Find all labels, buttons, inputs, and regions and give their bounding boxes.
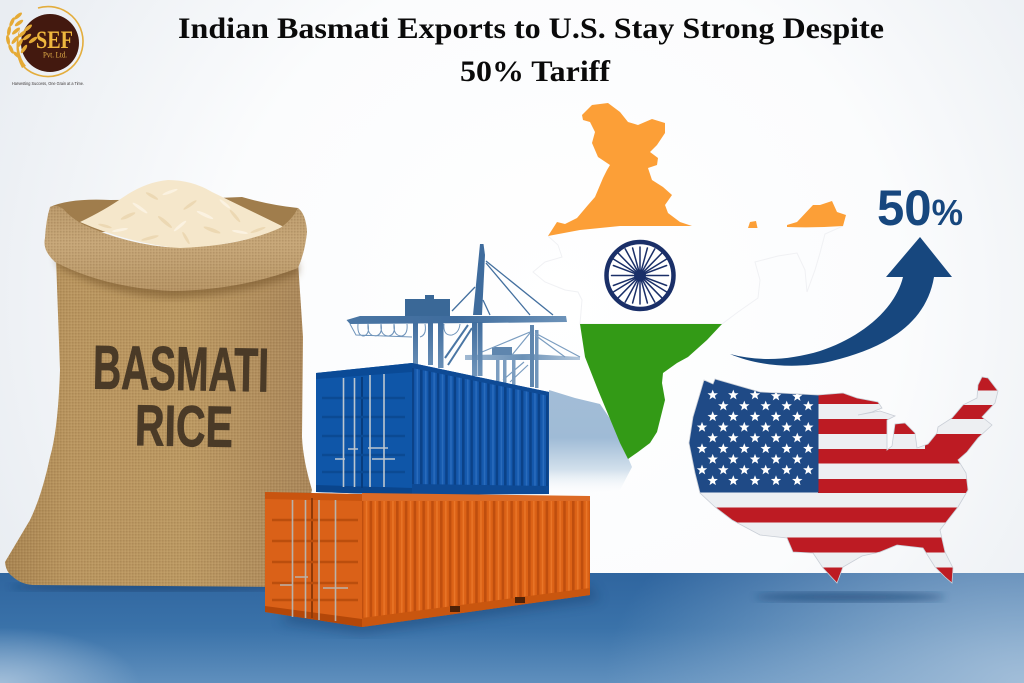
door bars — [280, 500, 348, 621]
orange north-east section — [787, 201, 846, 227]
sack label: RICE — [134, 393, 234, 460]
sack label — [92, 333, 270, 460]
rice sack — [5, 180, 312, 587]
green southern section — [580, 324, 722, 459]
USA map in flag pattern — [688, 376, 998, 584]
map edge — [689, 377, 998, 583]
crane stays and diagonals — [452, 261, 553, 315]
floor — [0, 573, 1024, 683]
main crane — [346, 244, 567, 376]
title: 50% Tariff — [460, 55, 611, 88]
orange shipping container — [265, 492, 590, 627]
canton stars — [697, 390, 814, 485]
sack opening — [50, 197, 298, 232]
logo: SEF Pvt. Ltd.: SEF — [36, 27, 73, 54]
port cranes and ship silhouette — [346, 244, 632, 496]
logo: SEF Pvt. Ltd. — [5, 7, 84, 87]
ship hull fade — [549, 390, 632, 496]
icon: Ashoka chakra — [606, 242, 674, 309]
side wall — [362, 495, 590, 627]
sack label: BASMATI — [92, 333, 270, 406]
flag canton — [689, 380, 818, 492]
side wall — [412, 363, 549, 495]
title: Indian Basmati Exports to U.S. Stay Strong Despite — [178, 12, 884, 45]
rice mound — [80, 180, 286, 249]
orange northern section — [548, 103, 692, 236]
shadow beneath cuff — [56, 256, 298, 298]
door face — [265, 492, 362, 627]
red stripes — [716, 378, 997, 582]
sack cuff — [44, 206, 307, 291]
sack body — [5, 258, 312, 587]
India map in flag colours — [533, 103, 846, 459]
arrow: upward curve — [730, 237, 952, 366]
title — [178, 12, 884, 88]
crane rope truss — [350, 324, 460, 337]
icon: wheat sprigs — [5, 11, 38, 68]
logo: SEF Pvt. Ltd.: Harvesting Success, One Grain at a Time. — [12, 81, 84, 87]
door face — [316, 363, 412, 495]
white stripes base — [700, 390, 983, 568]
blue shipping container — [316, 363, 549, 495]
logo: SEF Pvt. Ltd.: Pvt. Ltd. — [43, 50, 67, 60]
door bars — [335, 374, 395, 487]
orange small patch — [748, 221, 758, 228]
map outline: white band — [533, 226, 843, 324]
rear crane — [465, 325, 580, 388]
tariff figure: 50%: 50% — [877, 180, 963, 236]
